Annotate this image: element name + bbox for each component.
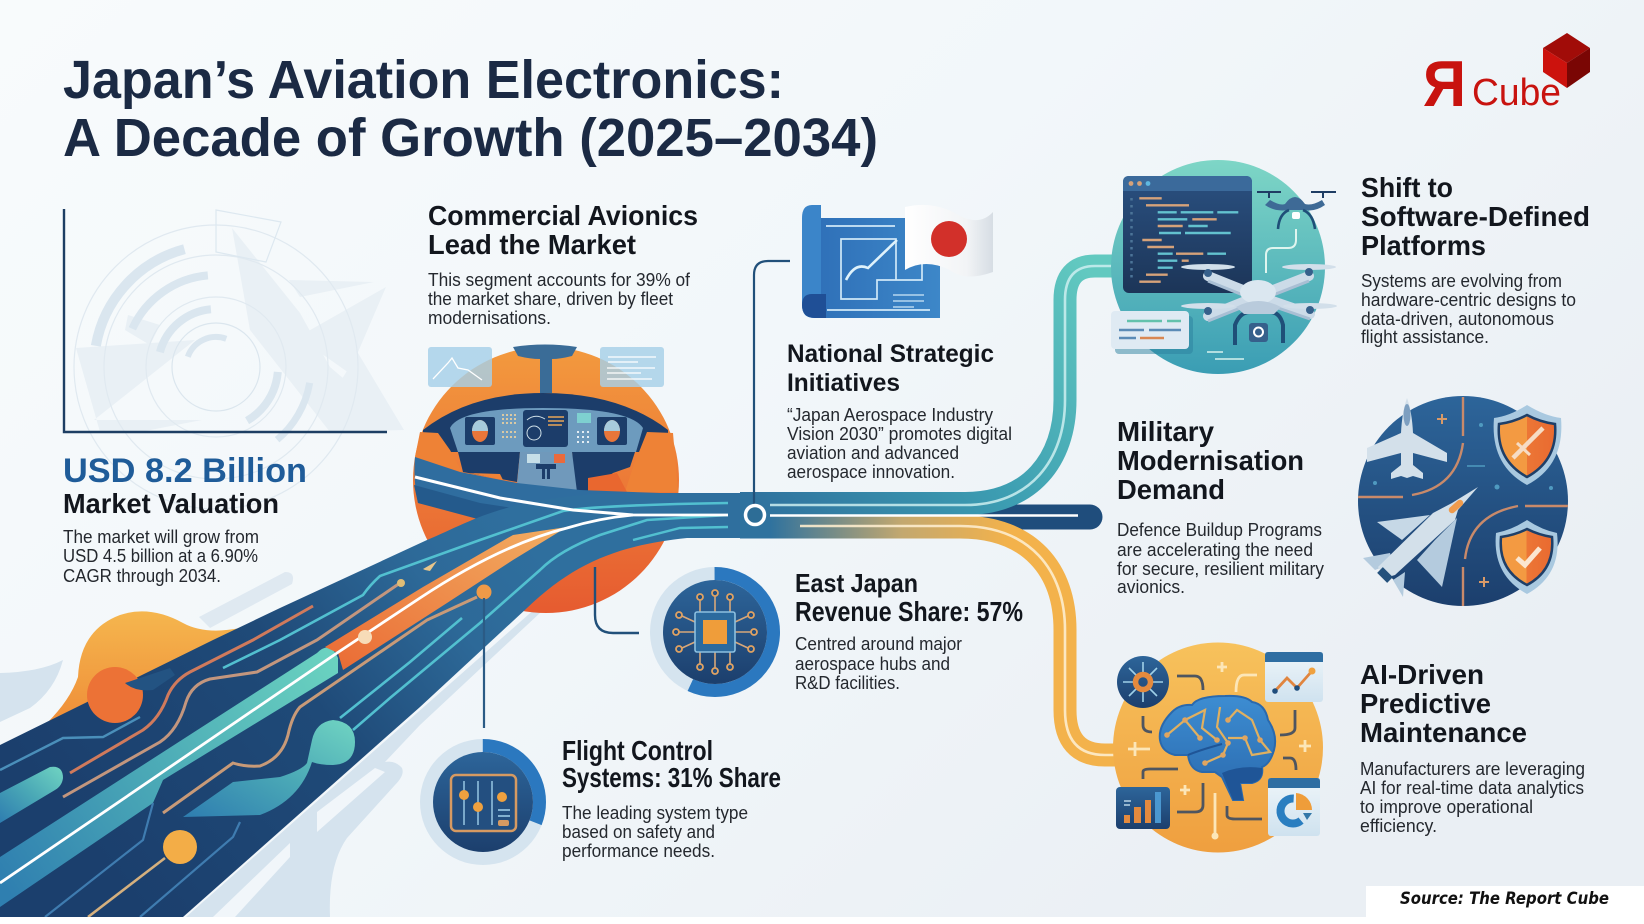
orange band [325, 527, 567, 670]
jet lower [1363, 487, 1478, 597]
stat: market valuation: USD 8.2 Billion [63, 452, 307, 490]
teal pipe [740, 266, 1116, 504]
text: commercial avionics: This segment accounts for 39% of [428, 270, 691, 290]
text: software-defined: flight assistance. [1361, 327, 1489, 347]
text: east japan [795, 568, 1023, 693]
icon: jets and shields [1358, 396, 1568, 606]
stat: market valuation [63, 452, 307, 586]
text: flight control: performance needs. [562, 841, 715, 861]
connector: national initiatives [754, 261, 790, 515]
line: orange wave [70, 606, 313, 773]
icon: software and drones [1111, 160, 1337, 374]
text: flight control: The leading system type [562, 803, 748, 823]
title: A Decade of Growth (2025–2034) [63, 108, 878, 168]
data ribbon from cockpit [0, 457, 780, 917]
yellow blob [47, 611, 240, 723]
title: Japan’s Aviation Electronics: [63, 50, 784, 110]
teal band [0, 648, 338, 907]
logo: RCube: Я [1423, 47, 1466, 120]
text: AI predictive: efficiency. [1360, 816, 1437, 836]
cockpit side panels [428, 347, 664, 387]
text: commercial avionics [428, 200, 698, 328]
stat: market valuation: USD 4.5 billion at a 6.90% [63, 546, 258, 566]
upper strand across cockpit [414, 457, 780, 525]
text: software-defined [1361, 172, 1590, 347]
text: commercial avionics: Lead the Market [428, 229, 636, 260]
text: military modernisation [1117, 416, 1324, 597]
connector: east japan [595, 567, 639, 633]
source credit [1366, 886, 1644, 924]
faded radar and aircraft graphic [74, 210, 404, 509]
text: software-defined: Software-Defined [1361, 201, 1590, 232]
text: AI predictive: to improve operational [1360, 797, 1533, 817]
stat: market valuation: Market Valuation [63, 488, 279, 519]
text: military modernisation: for secure, resilient military [1117, 559, 1324, 579]
text: east japan: aerospace hubs and [795, 654, 950, 674]
hub node [746, 506, 764, 524]
text: commercial avionics: modernisations. [428, 308, 551, 328]
text: AI predictive [1360, 659, 1585, 836]
text: national strategic initiatives: aviation and advanced [787, 443, 959, 463]
title [63, 50, 878, 168]
text: east japan: East Japan [795, 568, 918, 598]
circuit traces [1143, 676, 1296, 819]
large drone [1181, 264, 1337, 345]
orange pipe [740, 527, 1120, 755]
pie chart card [1268, 778, 1320, 836]
chart axes [64, 209, 387, 432]
teal lines [340, 618, 462, 718]
pale background shapes [0, 572, 541, 917]
nodes [358, 630, 372, 644]
jet upper [1367, 398, 1447, 479]
line: tan wave [63, 583, 400, 797]
text: software-defined: hardware-centric designs to [1361, 290, 1576, 310]
icon: flight control donut 31% [420, 739, 546, 865]
cockpit strand lines [415, 477, 633, 515]
logo: RCube: Cube [1472, 72, 1561, 114]
brain [1160, 696, 1275, 800]
text: national strategic initiatives: Vision 2030” promotes digital [787, 424, 1012, 444]
text: military modernisation: Demand [1117, 474, 1225, 505]
text: software-defined: Systems are evolving from [1361, 271, 1562, 291]
stat: market valuation: The market will grow from [63, 527, 259, 547]
text: military modernisation: Military [1117, 416, 1215, 447]
drone wire [1266, 229, 1296, 273]
line: tan lower [163, 597, 477, 813]
stat: market valuation: CAGR through 2034. [63, 566, 221, 586]
connector pipes [740, 266, 1120, 755]
logo: RCube [1423, 33, 1590, 120]
text: east japan: Centred around major [795, 634, 962, 654]
text: national strategic initiatives: Initiatives [787, 369, 900, 397]
text: flight control: Systems: 31% Share [562, 762, 781, 793]
text: east japan: R&D facilities. [795, 673, 900, 693]
small code card [1111, 311, 1193, 354]
line: white [0, 515, 728, 883]
teal pill left [0, 767, 63, 823]
teal blob [183, 720, 355, 817]
text: AI predictive: Maintenance [1360, 717, 1527, 748]
text: software-defined: Shift to [1361, 172, 1453, 203]
icon: chip donut 57% [650, 567, 780, 697]
dot and lines lower [163, 830, 197, 864]
text: military modernisation: Modernisation [1117, 445, 1304, 476]
text: AI predictive: Manufacturers are leveraging [1360, 759, 1585, 779]
illustration: cockpit [413, 344, 679, 613]
text: AI predictive: AI-Driven [1360, 659, 1484, 690]
text: flight control [562, 735, 781, 861]
icon: AI brain [1113, 642, 1323, 852]
text: military modernisation: are accelerating the need [1117, 540, 1313, 560]
text: national strategic initiatives [787, 340, 1012, 482]
text: commercial avionics: Commercial Avionics [428, 200, 698, 231]
text: military modernisation: avionics. [1117, 577, 1185, 597]
orange circle and lip [87, 667, 143, 723]
text: east japan: Revenue Share: 57% [795, 596, 1023, 627]
source credit: Source: The Report Cube [1400, 889, 1609, 909]
small drone [1257, 192, 1336, 229]
text: AI predictive: Predictive [1360, 688, 1491, 719]
text: flight control: based on safety and [562, 822, 715, 842]
text: software-defined: Platforms [1361, 230, 1486, 261]
text: national strategic initiatives: aerospace innovation. [787, 462, 955, 482]
text: software-defined: data-driven, autonomous [1361, 309, 1554, 329]
text: commercial avionics: the market share, driven by fleet [428, 289, 673, 309]
shield upper [1494, 405, 1561, 485]
main ribbon body [0, 493, 780, 917]
line: blue [0, 717, 140, 770]
icon: blueprint and flag [802, 205, 993, 318]
text: military modernisation: Defence Buildup Programs [1117, 520, 1322, 540]
text: national strategic initiatives: “Japan Aerospace Industry [787, 405, 993, 425]
connector: flight control [483, 598, 485, 728]
shield lower [1496, 520, 1558, 594]
line: teal top [223, 503, 728, 668]
bar chart card [1116, 787, 1170, 829]
line chart card [1265, 652, 1323, 702]
dark centre bar [960, 504, 1090, 530]
text: national strategic initiatives: National Strategic [787, 340, 994, 368]
text: AI predictive: AI for real-time data analytics [1360, 778, 1584, 798]
text: flight control: Flight Control [562, 735, 713, 766]
gear badge [1117, 656, 1169, 708]
